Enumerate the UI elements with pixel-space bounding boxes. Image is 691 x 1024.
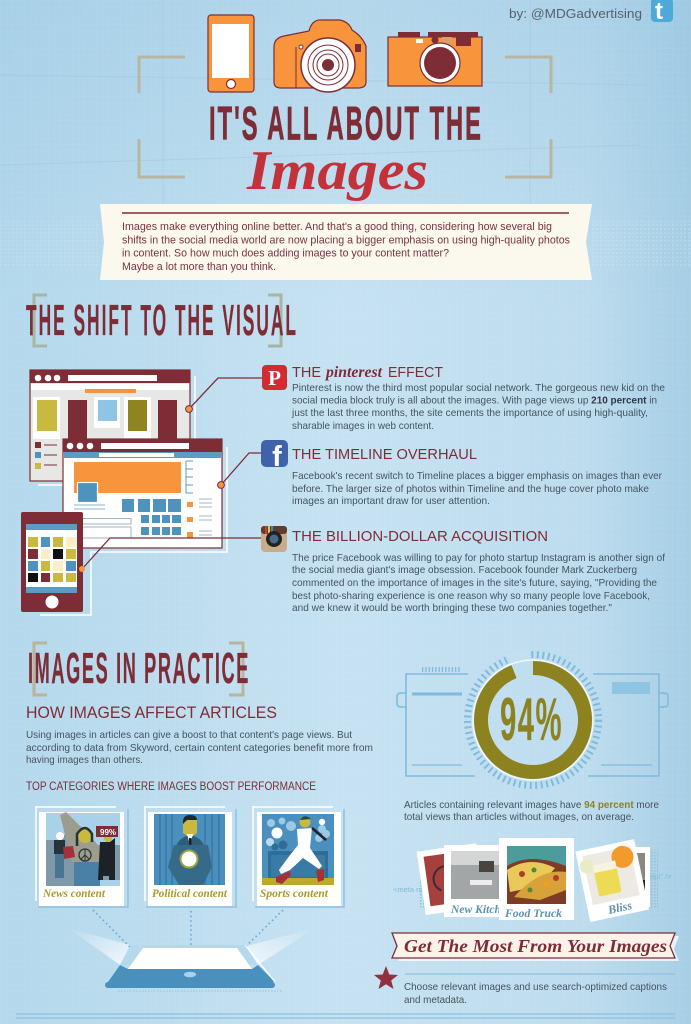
text: timeline: before. The larger size of photos within Timeline and the huge cover photo make — [292, 484, 649, 495]
icon: facebook: f — [272, 441, 282, 473]
photo: new kitchen: New Kitch — [450, 902, 501, 916]
icon: star — [374, 966, 398, 989]
polaroid: news content: 99% — [100, 828, 116, 837]
icon: instagram — [261, 526, 287, 552]
intro banner: in content. So how much does adding images to your content matter? — [122, 248, 449, 260]
text: articles intro: according to data from Skyword, certain content categories benefit more from — [26, 743, 373, 754]
connector: instagram — [79, 538, 262, 572]
chart: 94 percent ring: 94% — [500, 686, 563, 753]
text: IMAGES IN PRACTICE — [28, 644, 250, 693]
photo: bliss — [575, 839, 649, 922]
text: pinterest — [291, 383, 665, 432]
text: 94 percent — [404, 800, 659, 823]
text: acquisition: the social media giant's image obsession. Facebook founder Mark Zuckerberg — [292, 565, 637, 576]
photo: new kitchen — [444, 845, 506, 917]
window: facebook timeline — [63, 439, 227, 552]
icon: facebook — [261, 440, 288, 473]
section heading: the shift to the visual — [26, 295, 298, 346]
intro banner — [100, 204, 592, 280]
text: 94 percent: Articles containing relevant images have 94 percent more — [404, 800, 659, 811]
polaroid: sports content: Sports content — [260, 886, 329, 900]
connector: pinterest — [186, 378, 262, 412]
icon: twitter — [651, 0, 673, 25]
viewfinder brackets — [139, 57, 551, 177]
text: timeline: images an important draw for user attention. — [292, 496, 490, 507]
text: acquisition — [292, 553, 665, 614]
heading: billion-dollar acquisition: THE BILLION-DOLLAR ACQUISITION — [292, 529, 548, 545]
icon: rangefinder camera — [388, 32, 482, 86]
light beams — [68, 928, 315, 965]
tablet device — [21, 512, 91, 615]
footer rule — [16, 1014, 675, 1018]
text: pinterest: just the last three months, the site cements the importance of using high-quality, — [291, 408, 648, 419]
heading: timeline overhaul: THE TIMELINE OVERHAUL — [292, 447, 477, 463]
polaroid: sports content — [253, 806, 344, 907]
intro banner: shifts in the social media world are now placing a bigger emphasis on using high-quality photos — [122, 234, 571, 246]
photo collage: ript" /> — [650, 872, 672, 881]
title script: Images — [246, 140, 428, 202]
text: timeline — [292, 471, 663, 507]
text: tip: Choose relevant images and use search-optimized captions — [404, 982, 667, 993]
polaroid: political content: Political content — [152, 886, 228, 900]
text: 94 percent: total views than articles without images, on average. — [404, 812, 634, 823]
text: tip: and metadata. — [404, 995, 467, 1006]
byline: by: @MDGadvertising — [509, 7, 642, 21]
heading: pinterest effect: EFFECT — [388, 365, 443, 381]
polaroid: news content — [36, 806, 128, 907]
photo collage: <meta na — [393, 885, 425, 894]
icon: smartphone — [208, 15, 254, 92]
polaroid: political content — [145, 806, 236, 907]
text: timeline: Facebook's recent switch to Timeline places a bigger emphasis on images than ever — [292, 471, 663, 482]
intro banner: Maybe a lot more than you think. — [122, 261, 276, 273]
section heading: images in practice — [28, 643, 250, 695]
text: articles intro: Using images in articles can give a boost to that content's page views. But — [26, 730, 352, 741]
text: articles intro — [26, 730, 373, 766]
chart: browser wireframe behind ring — [397, 670, 668, 776]
photo: bicycle — [417, 843, 485, 915]
heading: pinterest effect — [292, 364, 443, 381]
illustration: browser windows and tablet — [21, 370, 227, 615]
text: tip — [404, 982, 667, 1006]
tablet illustration — [105, 945, 283, 991]
text: articles intro: having images than others. — [26, 755, 143, 766]
banner: get the most from your images: Get The Most From Your Images — [404, 936, 667, 956]
text: pinterest: sharable images in web content. — [292, 421, 434, 432]
heading: pinterest effect: THE — [292, 365, 321, 381]
dotted lines — [93, 910, 283, 957]
photo collage — [393, 838, 672, 922]
heading: pinterest effect: pinterest — [324, 364, 383, 381]
text: acquisition: The price Facebook was willing to pay for photo startup Instagram is another sign of — [292, 553, 665, 564]
icon: SLR camera — [274, 20, 366, 92]
banner: get the most from your images — [392, 933, 679, 961]
photo: building — [623, 847, 650, 907]
text: acquisition: commented on the importance of images in the site's future, saying, "Providing the — [292, 578, 657, 589]
photo: food truck: Food Truck — [504, 906, 562, 920]
text: acquisition: and we knew it would be worth bringing these two companies together." — [292, 603, 612, 614]
tip line — [405, 973, 675, 975]
text: pinterest: Pinterest is now the third most popular social network. The gorgeous new kid on the — [292, 383, 665, 394]
subheading: top categories: TOP CATEGORIES WHERE IMAGES BOOST PERFORMANCE — [26, 781, 316, 793]
photo: bliss: Bliss — [606, 898, 633, 917]
text: acquisition: best photo-sharing experience is one reason why so many people love Facebook, — [292, 591, 650, 602]
text: pinterest: social media block truly is all about the images. With page views up 210 percent in — [292, 396, 657, 406]
window: pinterest board — [30, 370, 195, 485]
polaroid: news content: News content — [42, 886, 106, 900]
intro banner: Images make everything online better. And that's a good thing, considering how several big — [122, 221, 552, 233]
icon: pinterest — [262, 365, 287, 390]
subheading: how images affect articles: HOW IMAGES AFFECT ARTICLES — [26, 704, 277, 722]
chart: 94 percent ring — [468, 654, 598, 786]
connector: facebook — [218, 453, 262, 488]
icon: pinterest: P — [268, 366, 281, 390]
photo: food truck — [499, 838, 574, 920]
